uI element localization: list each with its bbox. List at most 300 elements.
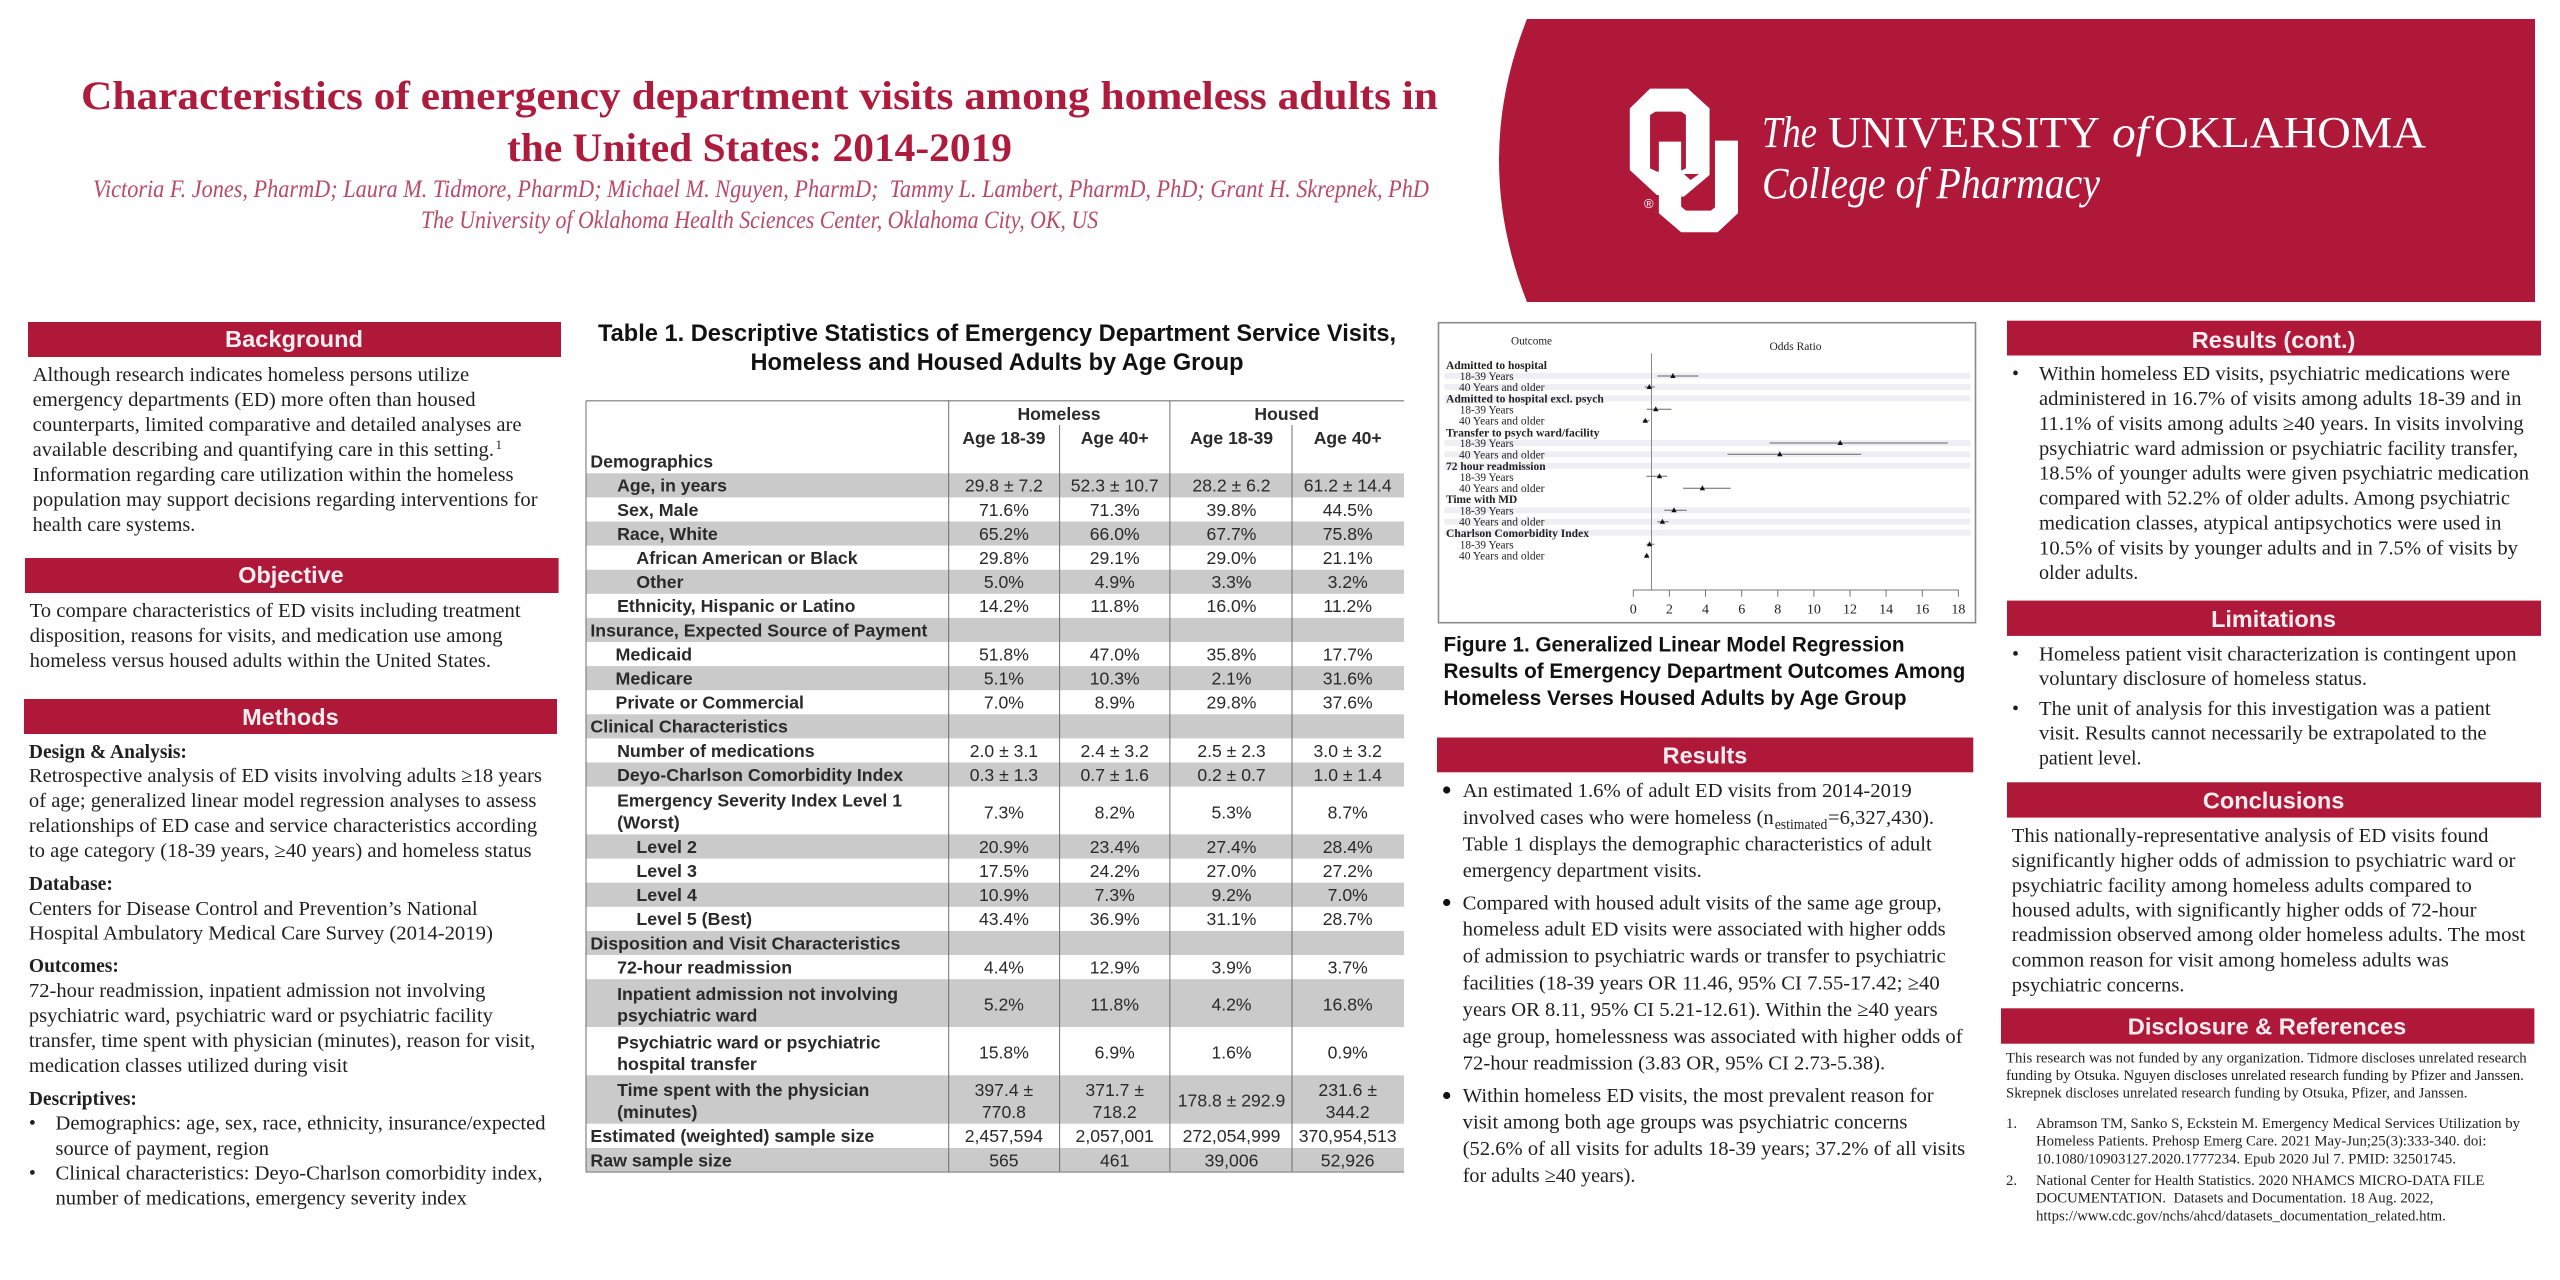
- table section: clinical characteristics: Deyo-Charlson Comorbidity Index: [617, 765, 903, 785]
- chart column headings: Outcome: [1511, 335, 1552, 348]
- table section: disposition and visit characteristics: 16.8%: [1323, 995, 1373, 1015]
- references list: Homeless Patients. Prehosp Emerg Care. 2021 May-Jun;25(3):333-340. doi:: [2036, 1134, 2486, 1150]
- table section: disposition and visit characteristics: 397.4 ±: [975, 1080, 1034, 1100]
- heading: methods: Methods: [242, 704, 339, 730]
- table section: clinical characteristics: 0.2 ± 0.7: [1197, 765, 1266, 785]
- heading: background: Background: [225, 326, 363, 352]
- objective text: To compare characteristics of ED visits including treatment: [30, 600, 521, 622]
- design and analysis: Design & Analysis:: [29, 741, 187, 763]
- references list: [2006, 1116, 2521, 1225]
- design and analysis: of age; generalized linear model regression analyses to assess: [29, 790, 537, 812]
- results bullet 2: Compared with housed adult visits of the same age group,: [1463, 892, 1942, 914]
- limitations text: visit. Results cannot necessarily be extrapolated to the: [2039, 722, 2487, 744]
- table section: disposition and visit characteristics: psychiatric ward: [617, 1006, 757, 1026]
- table section: sample sizes: 39,006: [1205, 1150, 1259, 1170]
- table section: disposition and visit characteristics: Inpatient admission not involving: [617, 984, 898, 1004]
- table section: clinical characteristics: 27.4%: [1207, 837, 1257, 857]
- results bullet 3: for adults ≥40 years).: [1463, 1165, 1635, 1187]
- table section: disposition and visit characteristics: 770.8: [982, 1102, 1026, 1122]
- results continued text: •: [2012, 363, 2019, 385]
- table section: clinical characteristics: 2.0 ± 3.1: [970, 741, 1038, 761]
- results bullet 2: homeless adult ED visits were associated with higher odds: [1463, 919, 1946, 941]
- chart outcome labels: 40 Years and older: [1459, 449, 1545, 462]
- background text: population may support decisions regarding interventions for: [33, 489, 538, 511]
- outcomes: transfer, time spent with physician (minutes), reason for visit,: [29, 1030, 535, 1052]
- table section: disposition and visit characteristics: Disposition and Visit Characteristics: [590, 933, 901, 953]
- panel: methods: [24, 699, 557, 1210]
- university wordmark: College of Pharmacy: [1762, 159, 2100, 208]
- table section: disposition and visit characteristics: 371.7 ±: [1085, 1080, 1144, 1100]
- panel: disclosure and references: [2001, 1008, 2534, 1225]
- chart outcome labels: 18-39 Years: [1460, 437, 1514, 450]
- authors and affiliation: [93, 176, 1429, 234]
- references list: 1.: [2006, 1116, 2017, 1132]
- table header: Homeless: [1017, 404, 1101, 424]
- chart axis: 16: [1915, 602, 1929, 617]
- figure caption: [1444, 632, 1965, 710]
- results bullet 1: involved cases who were homeless (n: [1463, 807, 1774, 829]
- table section: demographics: 67.7%: [1207, 524, 1257, 544]
- chart axis: 10: [1807, 602, 1821, 617]
- references list: 10.1080/10903127.2020.1777234. Epub 2020 Jul 7. PMID: 32501745.: [2036, 1151, 2456, 1167]
- table section: insurance: Medicaid: [616, 644, 692, 664]
- table title: [598, 320, 1396, 376]
- authors and affiliation: Victoria F. Jones, PharmD; Laura M. Tidmore, PharmD; Michael M. Nguyen, PharmD; Tammy L. Lambert, PharmD, PhD; Grant H. Skrepnek, PhD: [93, 176, 1429, 203]
- table section: demographics: 71.6%: [979, 500, 1029, 520]
- table section: demographics: 28.2 ± 6.2: [1192, 476, 1271, 496]
- results bullet 3: [1443, 1085, 1965, 1187]
- results bullet 1: emergency department visits.: [1463, 860, 1702, 882]
- descriptives: •: [29, 1162, 36, 1184]
- chart outcome labels: 40 Years and older: [1459, 381, 1545, 394]
- table title: Homeless and Housed Adults by Age Group: [750, 349, 1244, 376]
- authors and affiliation: The University of Oklahoma Health Sciences Center, Oklahoma City, OK, US: [421, 207, 1098, 234]
- chart axis: [1630, 353, 1965, 617]
- table section: insurance: 7.0%: [984, 693, 1024, 713]
- table section: clinical characteristics: 7.3%: [984, 802, 1024, 822]
- table section: demographics: [617, 476, 1392, 616]
- table section: clinical characteristics: Level 3: [636, 861, 697, 881]
- table header: Age 40+: [1081, 428, 1149, 448]
- design and analysis: Retrospective analysis of ED visits involving adults ≥18 years: [29, 765, 542, 787]
- results continued text: administered in 16.7% of visits among adults 18-39 and in: [2039, 388, 2522, 410]
- results continued text: 10.5% of visits by younger adults and in 7.5% of visits by: [2039, 538, 2518, 560]
- panel: objective: [25, 558, 559, 672]
- results bullet 2: age group, homelessness was associated with higher odds of: [1463, 1026, 1963, 1048]
- table section: demographics: 4.9%: [1095, 572, 1135, 592]
- university wordmark: of: [2112, 108, 2155, 157]
- panel: results: [1437, 738, 1973, 1187]
- conclusions text: readmission observed among older homeless adults. The most: [2012, 924, 2526, 946]
- table section: clinical characteristics: [590, 717, 1382, 929]
- table section: demographics: Other: [636, 572, 684, 592]
- results bullet 3: visit among both age groups was psychiatric concerns: [1463, 1112, 1907, 1134]
- table section: clinical characteristics: 5.3%: [1211, 802, 1252, 822]
- chart axis: 12: [1843, 602, 1857, 617]
- limitations text: voluntary disclosure of homeless status.: [2039, 668, 2367, 690]
- background text: health care systems.: [33, 514, 195, 536]
- table section: demographics: 3.2%: [1328, 572, 1368, 592]
- objective text: disposition, reasons for visits, and medication use among: [30, 625, 503, 647]
- table section: disposition and visit characteristics: 718.2: [1093, 1102, 1137, 1122]
- chart outcome labels: 40 Years and older: [1459, 549, 1545, 562]
- table section: clinical characteristics: Level 4: [636, 885, 697, 905]
- heading: objective: Objective: [238, 562, 344, 588]
- database: Database:: [29, 873, 113, 895]
- table section: clinical characteristics: 27.0%: [1207, 861, 1257, 881]
- descriptives: number of medications, emergency severity index: [56, 1188, 467, 1210]
- table section: demographics: 29.0%: [1207, 548, 1257, 568]
- table section: clinical characteristics: 31.1%: [1207, 909, 1257, 929]
- table section: clinical characteristics: 0.7 ± 1.6: [1081, 765, 1149, 785]
- chart outcome labels: Time with MD: [1446, 493, 1517, 506]
- figure caption: Homeless Verses Housed Adults by Age Group: [1444, 686, 1906, 710]
- conclusions text: [2012, 825, 2526, 997]
- results bullet 3: Within homeless ED visits, the most prevalent reason for: [1463, 1085, 1934, 1107]
- chart outcome labels: 18-39 Years: [1460, 471, 1514, 484]
- table section: disposition and visit characteristics: 1.6%: [1211, 1043, 1252, 1063]
- table section: demographics: 65.2%: [979, 524, 1029, 544]
- table section: disposition and visit characteristics: Time spent with the physician: [617, 1080, 869, 1100]
- table section: clinical characteristics: 7.3%: [1095, 885, 1135, 905]
- poster title: [81, 73, 1438, 170]
- chart outcome labels: 40 Years and older: [1459, 482, 1545, 495]
- title block: [81, 73, 1438, 234]
- background text: 1: [496, 437, 502, 452]
- results bullet 1: =6,327,430).: [1828, 807, 1934, 829]
- results bullet 1: An estimated 1.6% of adult ED visits from 2014-2019: [1463, 780, 1912, 802]
- references list: 2.: [2006, 1173, 2017, 1189]
- limitations text: •: [2012, 698, 2019, 720]
- results bullet 2: 72-hour readmission (3.83 OR, 95% CI 2.73-5.38).: [1463, 1053, 1885, 1075]
- database: Hospital Ambulatory Medical Care Survey (2014-2019): [29, 922, 493, 944]
- table section: sample sizes: 461: [1100, 1150, 1129, 1170]
- table section: sample sizes: 565: [989, 1150, 1019, 1170]
- chart: forest plot of odds ratios: [1438, 323, 1976, 623]
- table section: disposition and visit characteristics: 3.9%: [1211, 957, 1252, 977]
- results bullet 2: of admission to psychiatric wards or transfer to psychiatric: [1463, 946, 1946, 968]
- table section: sample sizes: 272,054,999: [1183, 1126, 1280, 1146]
- table section: sample sizes: 52,926: [1321, 1150, 1375, 1170]
- table header: Age 18-39: [1190, 428, 1273, 448]
- table section: sample sizes: 370,954,513: [1299, 1126, 1397, 1146]
- table section: sample sizes: 2,457,594: [965, 1126, 1043, 1146]
- conclusions text: significantly higher odds of admission to psychiatric ward or: [2012, 850, 2516, 872]
- table section: disposition and visit characteristics: (minutes): [617, 1102, 697, 1122]
- table section: demographics: 61.2 ± 14.4: [1304, 476, 1392, 496]
- disclosure text: funding by Otsuka. Nguyen discloses unrelated research funding by Pfizer and Janssen.: [2006, 1068, 2524, 1084]
- table section: demographics: 14.2%: [979, 596, 1029, 616]
- table section: demographics: 44.5%: [1323, 500, 1373, 520]
- references list: National Center for Health Statistics. 2020 NHAMCS MICRO-DATA FILE: [2036, 1173, 2484, 1189]
- table section: disposition and visit characteristics: 12.9%: [1090, 957, 1140, 977]
- background text: Information regarding care utilization within the homeless: [33, 464, 514, 486]
- table section: disposition and visit characteristics: 5.2%: [984, 995, 1024, 1015]
- table section: insurance: Private or Commercial: [616, 693, 804, 713]
- panel: conclusions: [2007, 782, 2541, 997]
- heading: results continued: Results (cont.): [2192, 327, 2355, 353]
- design and analysis: to age category (18-39 years, ≥40 years) and homeless status: [29, 840, 532, 862]
- results bullet 2: [1443, 892, 1963, 1075]
- chart outcome labels: 40 Years and older: [1459, 516, 1545, 529]
- university banner: [1499, 19, 2535, 302]
- chart column headings: Odds Ratio: [1770, 340, 1822, 353]
- table section: insurance: 29.8%: [1207, 693, 1257, 713]
- table section: clinical characteristics: 1.0 ± 1.4: [1314, 765, 1382, 785]
- design and analysis: [29, 741, 542, 862]
- chart outcome labels: 18-39 Years: [1460, 404, 1514, 417]
- icon: OU logo: [1630, 89, 1738, 232]
- university wordmark: UNIVERSITY: [1828, 108, 2100, 157]
- outcomes: medication classes utilized during visit: [29, 1055, 348, 1077]
- chart axis: 8: [1774, 602, 1781, 617]
- results continued text: Within homeless ED visits, psychiatric medications were: [2039, 363, 2510, 385]
- table section: clinical characteristics: 24.2%: [1090, 861, 1140, 881]
- table section: demographics: 16.0%: [1207, 596, 1257, 616]
- conclusions text: common reason for visit among homeless adults was: [2012, 950, 2449, 972]
- table section: demographics: African American or Black: [636, 548, 858, 568]
- table title: Table 1. Descriptive Statistics of Emergency Department Service Visits,: [598, 320, 1396, 347]
- descriptives: [29, 1088, 545, 1210]
- chart outcome labels: 40 Years and older: [1459, 415, 1545, 428]
- descriptives: Clinical characteristics: Deyo-Charlson comorbidity index,: [56, 1162, 542, 1184]
- figure caption: Figure 1. Generalized Linear Model Regression: [1444, 632, 1904, 656]
- table section: clinical characteristics: 7.0%: [1328, 885, 1368, 905]
- results bullet 2: facilities (18-39 years OR 11.46, 95% CI 7.55-17.42; ≥40: [1463, 972, 1940, 994]
- heading: disclosure and references: Disclosure & References: [2128, 1013, 2406, 1039]
- poster title: Characteristics of emergency department visits among homeless adults in: [81, 73, 1438, 118]
- table section: disposition and visit characteristics: 11.8%: [1090, 995, 1139, 1015]
- table section: clinical characteristics: 8.2%: [1095, 802, 1135, 822]
- background text: [33, 364, 538, 536]
- university wordmark: [1762, 108, 2426, 208]
- table section: demographics: 75.8%: [1323, 524, 1373, 544]
- results continued text: 11.1% of visits among adults ≥40 years. In visits involving: [2039, 413, 2524, 435]
- table section: sample sizes: Estimated (weighted) sample size: [590, 1126, 875, 1146]
- table section: clinical characteristics: 27.2%: [1323, 861, 1373, 881]
- chart axis: 4: [1702, 602, 1709, 617]
- chart outcome labels: 18-39 Years: [1460, 370, 1514, 383]
- references list: DOCUMENTATION. Datasets and Documentation. 18 Aug. 2022,: [2036, 1191, 2434, 1207]
- chart outcome labels: Admitted to hospital: [1446, 359, 1548, 372]
- table section: clinical characteristics: 43.4%: [979, 909, 1029, 929]
- table section: clinical characteristics: 2.4 ± 3.2: [1081, 741, 1149, 761]
- table header: Age 18-39: [962, 428, 1046, 448]
- results bullet 1: [1443, 780, 1934, 882]
- limitations text: The unit of analysis for this investigation was a patient: [2039, 698, 2491, 720]
- objective text: homeless versus housed adults within the United States.: [30, 650, 491, 672]
- table section: clinical characteristics: Emergency Severity Index Level 1: [617, 791, 902, 811]
- table section: insurance: 10.3%: [1090, 668, 1140, 688]
- conclusions text: This nationally-representative analysis of ED visits found: [2012, 825, 2488, 847]
- table: descriptive statistics: [586, 401, 1404, 1172]
- table section: disposition and visit characteristics: 4.2%: [1211, 995, 1252, 1015]
- table section: disposition and visit characteristics: 72-hour readmission: [617, 957, 792, 977]
- panel: results continued: [2007, 321, 2541, 584]
- table section: disposition and visit characteristics: 344.2: [1326, 1102, 1370, 1122]
- heading: limitations: Limitations: [2211, 606, 2336, 632]
- limitations text: Homeless patient visit characterization is contingent upon: [2039, 643, 2516, 665]
- disclosure text: [2006, 1050, 2527, 1102]
- table section: disposition and visit characteristics: 6.9%: [1095, 1043, 1135, 1063]
- table section: insurance: 2.1%: [1211, 668, 1252, 688]
- table section: insurance: 31.6%: [1323, 668, 1373, 688]
- chart outcome labels: 72 hour readmission: [1446, 460, 1546, 473]
- references list: Abramson TM, Sanko S, Eckstein M. Emergency Medical Services Utilization by: [2036, 1116, 2521, 1132]
- table section: clinical characteristics: Clinical Characteristics: [590, 717, 788, 737]
- table section: sample sizes: Raw sample size: [590, 1150, 732, 1170]
- results bullet 1: Table 1 displays the demographic characteristics of adult: [1463, 833, 1932, 855]
- table section: demographics: Sex, Male: [617, 500, 699, 520]
- background text: Although research indicates homeless persons utilize: [33, 364, 469, 386]
- outcomes: psychiatric ward, psychiatric ward or psychiatric facility: [29, 1005, 493, 1027]
- results continued text: older adults.: [2039, 562, 2138, 584]
- table section: clinical characteristics: 23.4%: [1090, 837, 1140, 857]
- table section: insurance: [590, 620, 1373, 713]
- table section: clinical characteristics: 2.5 ± 2.3: [1197, 741, 1266, 761]
- chart axis: 14: [1879, 602, 1893, 617]
- results continued text: [2012, 363, 2529, 584]
- table section: clinical characteristics: Level 2: [636, 837, 697, 857]
- table section: disposition and visit characteristics: 231.6 ±: [1318, 1080, 1377, 1100]
- table section: clinical characteristics: 3.0 ± 3.2: [1314, 741, 1382, 761]
- table header: Demographics: [590, 452, 713, 472]
- icon: OU logo: ®: [1644, 196, 1654, 211]
- descriptives: Descriptives:: [29, 1088, 137, 1110]
- table section: demographics: Age, in years: [617, 476, 727, 496]
- results continued text: compared with 52.2% of older adults. Among psychiatric: [2039, 488, 2510, 510]
- results continued text: 18.5% of younger adults were given psychiatric medication: [2039, 463, 2529, 485]
- table section: demographics: 29.1%: [1090, 548, 1140, 568]
- conclusions text: psychiatric concerns.: [2012, 975, 2184, 997]
- results bullet 1: estimated: [1775, 817, 1828, 833]
- chart outcome labels: [1446, 359, 1604, 562]
- panel: limitations: [2007, 601, 2541, 770]
- table section: demographics: 39.8%: [1207, 500, 1257, 520]
- table section: disposition and visit characteristics: hospital transfer: [617, 1054, 757, 1074]
- chart outcome labels: 18-39 Years: [1460, 538, 1514, 551]
- results continued text: medication classes, atypical antipsychotics were used in: [2039, 513, 2502, 535]
- objective text: [30, 600, 521, 672]
- table section: demographics: 29.8%: [979, 548, 1029, 568]
- table section: clinical characteristics: 0.3 ± 1.3: [970, 765, 1038, 785]
- results bullet 3: (52.6% of all visits for adults 18-39 years; 37.2% of all visits: [1463, 1138, 1965, 1160]
- limitations text: •: [2012, 643, 2019, 665]
- descriptives: source of payment, region: [56, 1138, 269, 1160]
- chart outcome labels: Transfer to psych ward/facility: [1446, 426, 1600, 439]
- results bullet 2: years OR 8.11, 95% CI 5.21-12.61). Within the ≥40 years: [1463, 999, 1938, 1021]
- table section: clinical characteristics: 17.5%: [979, 861, 1029, 881]
- chart column headings: [1511, 335, 1822, 353]
- chart axis: 18: [1951, 602, 1965, 617]
- table section: disposition and visit characteristics: 15.8%: [979, 1043, 1029, 1063]
- limitations text: patient level.: [2039, 748, 2142, 770]
- conclusions text: housed adults, with significantly higher odds of 72-hour: [2012, 900, 2477, 922]
- database: Centers for Disease Control and Prevention’s National: [29, 898, 478, 920]
- limitations text: [2012, 643, 2516, 770]
- database: [29, 873, 493, 944]
- results continued text: psychiatric ward admission or psychiatric facility transfer,: [2039, 438, 2518, 460]
- table section: insurance: 17.7%: [1323, 644, 1373, 664]
- table section: disposition and visit characteristics: 4.4%: [984, 957, 1024, 977]
- background text: available describing and quantifying care in this setting.: [33, 439, 494, 461]
- conclusions text: psychiatric facility among homeless adults compared to: [2012, 875, 2472, 897]
- descriptives: •: [29, 1112, 36, 1134]
- table section: insurance: 35.8%: [1207, 644, 1257, 664]
- table section: demographics: 66.0%: [1090, 524, 1140, 544]
- table header: [590, 404, 1382, 472]
- table section: demographics: 71.3%: [1090, 500, 1140, 520]
- chart axis: 6: [1738, 602, 1745, 617]
- university wordmark: OKLAHOMA: [2154, 108, 2426, 157]
- table section: clinical characteristics: Number of medications: [617, 741, 815, 761]
- table section: insurance: 37.6%: [1323, 693, 1373, 713]
- table section: sample sizes: [590, 1126, 1397, 1170]
- heading: conclusions: Conclusions: [2203, 788, 2344, 814]
- descriptives: Demographics: age, sex, race, ethnicity, insurance/expected: [56, 1112, 546, 1134]
- table section: sample sizes: 2,057,001: [1076, 1126, 1154, 1146]
- table section: clinical characteristics: 20.9%: [979, 837, 1029, 857]
- table section: clinical characteristics: 36.9%: [1090, 909, 1140, 929]
- outcomes: Outcomes:: [29, 955, 119, 977]
- design and analysis: relationships of ED case and service characteristics according: [29, 815, 537, 837]
- table section: demographics: 3.3%: [1211, 572, 1252, 592]
- table section: clinical characteristics: Level 5 (Best): [636, 909, 752, 929]
- chart confidence intervals and point estimates: [1643, 373, 1948, 558]
- table section: demographics: 5.0%: [984, 572, 1024, 592]
- table header: Age 40+: [1314, 428, 1382, 448]
- table section: insurance: Insurance, Expected Source of Payment: [590, 620, 928, 640]
- table section: clinical characteristics: 28.7%: [1323, 909, 1373, 929]
- table section: disposition and visit characteristics: 3.7%: [1328, 957, 1368, 977]
- table section: disposition and visit characteristics: [590, 933, 1377, 1122]
- chart outcome labels: 18-39 Years: [1460, 505, 1514, 518]
- table section: insurance: 5.1%: [984, 668, 1024, 688]
- chart axis: 2: [1666, 602, 1673, 617]
- table section: demographics: 21.1%: [1323, 548, 1373, 568]
- table section: disposition and visit characteristics: 178.8 ± 292.9: [1178, 1091, 1285, 1111]
- table header: Housed: [1254, 404, 1319, 424]
- table section: clinical characteristics: (Worst): [617, 812, 680, 832]
- panel: background: [28, 322, 561, 536]
- background text: emergency departments (ED) more often than housed: [33, 389, 476, 411]
- table section: disposition and visit characteristics: 0.9%: [1328, 1043, 1368, 1063]
- table section: clinical characteristics: 9.2%: [1211, 885, 1252, 905]
- table section: insurance: 51.8%: [979, 644, 1029, 664]
- figure caption: Results of Emergency Department Outcomes Among: [1444, 659, 1965, 683]
- references list: https://www.cdc.gov/nchs/ahcd/datasets_documentation_related.htm.: [2036, 1209, 2446, 1225]
- outcomes: 72-hour readmission, inpatient admission not involving: [29, 980, 485, 1002]
- table section: demographics: 52.3 ± 10.7: [1071, 476, 1159, 496]
- table section: clinical characteristics: 28.4%: [1323, 837, 1373, 857]
- table section: clinical characteristics: 10.9%: [979, 885, 1029, 905]
- poster title: the United States: 2014-2019: [507, 125, 1012, 170]
- table section: clinical characteristics: 8.7%: [1328, 802, 1368, 822]
- disclosure text: Skrepnek discloses unrelated research funding by Otsuka, Pfizer, and Janssen.: [2006, 1086, 2468, 1102]
- table section: disposition and visit characteristics: Psychiatric ward or psychiatric: [617, 1032, 881, 1052]
- table section: demographics: 29.8 ± 7.2: [965, 476, 1043, 496]
- table section: demographics: Race, White: [617, 524, 718, 544]
- chart axis: 0: [1630, 602, 1637, 617]
- table section: insurance: 47.0%: [1090, 644, 1140, 664]
- outcomes: [29, 955, 535, 1077]
- background text: counterparts, limited comparative and detailed analyses are: [33, 414, 522, 436]
- disclosure text: This research was not funded by any organization. Tidmore discloses unrelated research: [2006, 1050, 2527, 1066]
- table section: insurance: Medicare: [616, 668, 693, 688]
- chart outcome labels: Charlson Comorbidity Index: [1446, 527, 1589, 540]
- table section: demographics: 11.8%: [1090, 596, 1139, 616]
- table section: insurance: 8.9%: [1095, 693, 1135, 713]
